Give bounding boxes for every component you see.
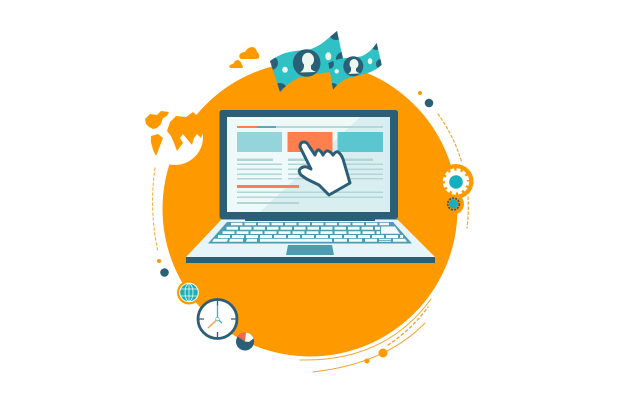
icon: gears (438, 164, 474, 214)
icon: pie chart (236, 332, 254, 350)
trackpad (286, 245, 334, 255)
laptop screen (227, 117, 390, 212)
icon: globe (145, 109, 204, 165)
icon: pointing hand cursor (299, 142, 350, 195)
laptop base (186, 220, 435, 257)
icon: clouds (229, 47, 259, 68)
base front edge (186, 257, 435, 263)
large bill (270, 31, 343, 92)
icon: money bills (270, 31, 382, 92)
ad panels (237, 132, 383, 152)
icon: globe badge (177, 280, 201, 304)
keyboard (208, 222, 412, 244)
laptop (186, 110, 435, 263)
illustration: pay per click laptop (145, 31, 474, 372)
base hinge (245, 218, 375, 221)
orange heading bar (237, 185, 299, 188)
small bill (328, 43, 382, 90)
laptop lid (220, 110, 398, 219)
orbit lines and dots (153, 91, 468, 372)
background orange circle (162, 62, 458, 356)
screen top bar (237, 126, 383, 128)
icon: clock (198, 300, 237, 338)
text lines (237, 158, 383, 204)
